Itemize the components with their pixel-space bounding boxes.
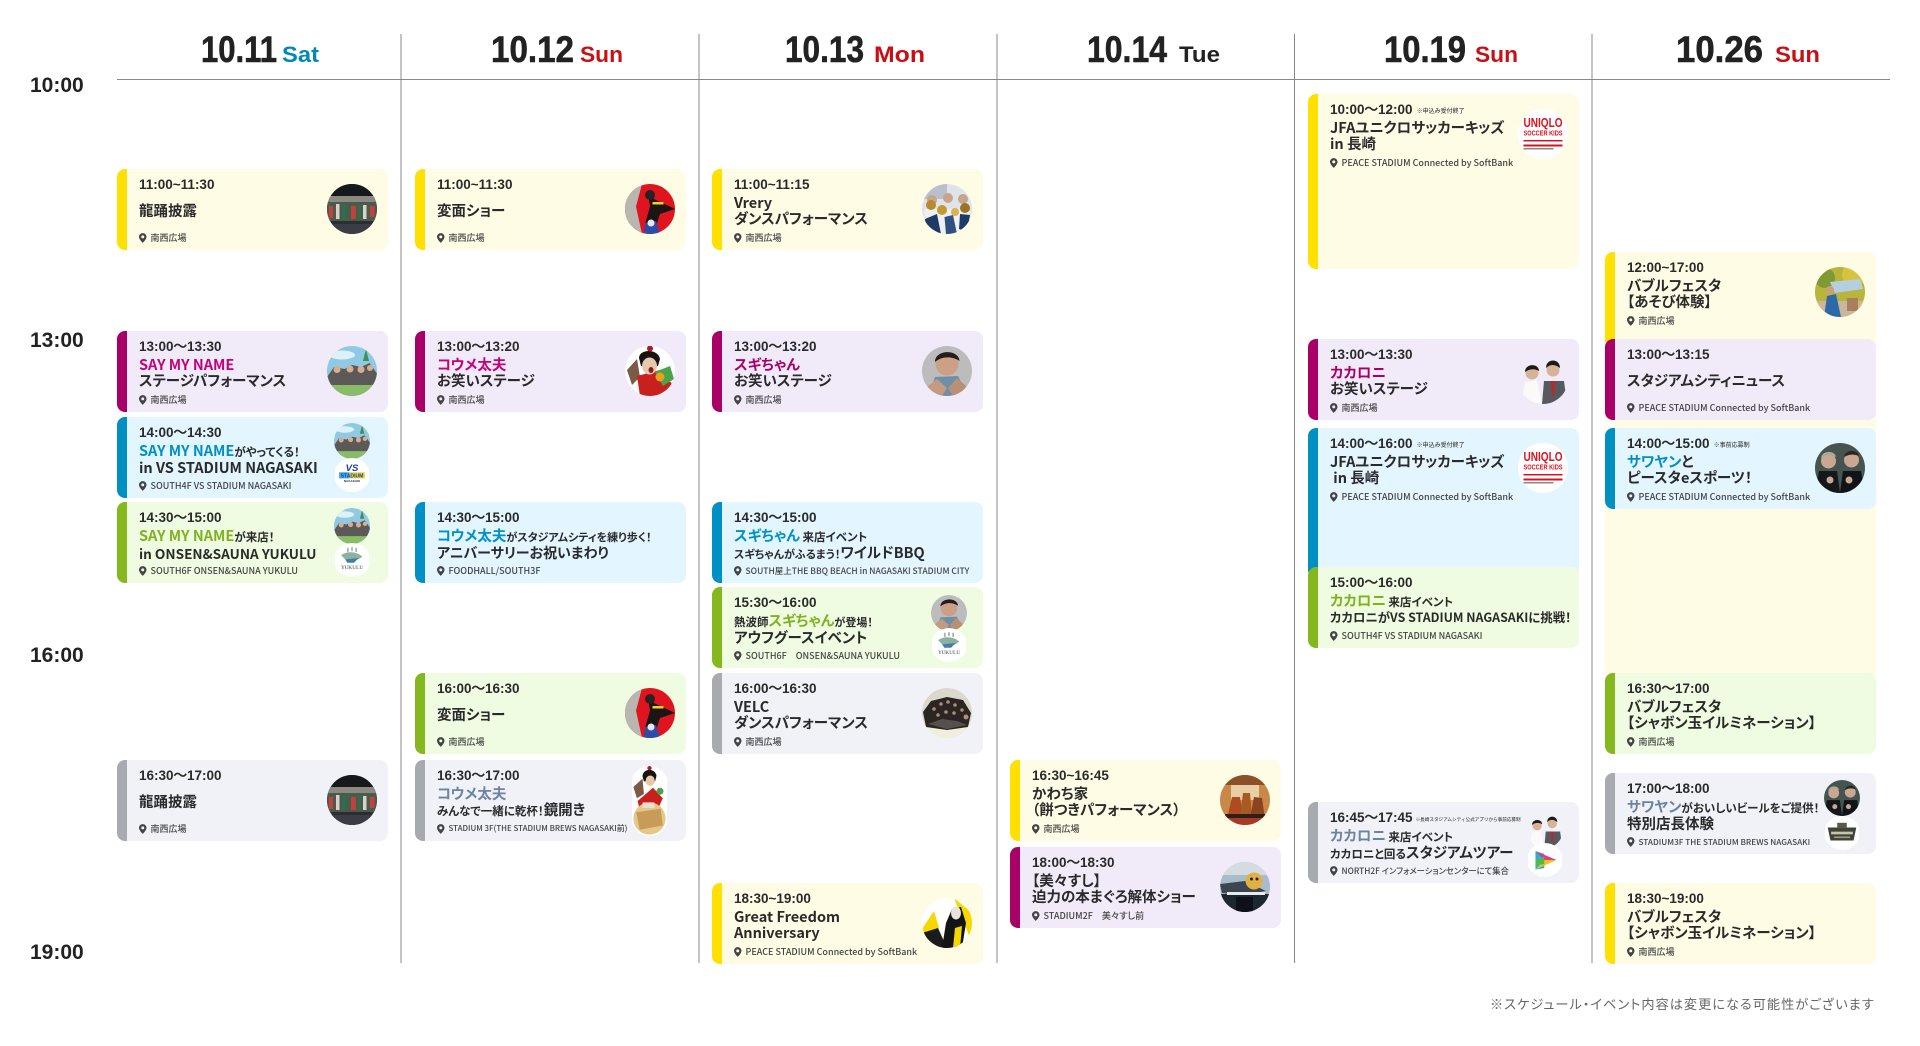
time: 18:30~19:00: [1627, 890, 1704, 906]
title: アニバーサリーお祝いまわり: [437, 543, 609, 563]
logo: [1518, 443, 1568, 493]
title: バブルフェスタ: [1627, 275, 1721, 296]
title: [1627, 278, 1721, 310]
title: バブルフェスタ: [1627, 696, 1721, 717]
title: [1330, 365, 1428, 397]
time: 14:30～15:00: [734, 510, 817, 524]
card: 10.19 16:45 スタジアムツアー: [1308, 802, 1579, 883]
location: SOUTH4F VS STADIUM NAGASAKI: [1342, 629, 1482, 642]
time axis label 10:00: 10:00: [30, 74, 84, 97]
title: [139, 354, 286, 391]
card: 10.26 18:30 シャボン玉: [1605, 883, 1876, 964]
time: 12:00~17:00: [1627, 260, 1704, 274]
title: in 長崎: [1333, 467, 1379, 488]
title: [139, 440, 318, 478]
title: [1032, 873, 1196, 905]
card: 10.26 17:00 特別店長体験: [1605, 773, 1876, 854]
title: SAY MY NAMEが来店！: [139, 525, 274, 546]
photo: [922, 346, 972, 396]
card: 10.14 18:00 美々すし: [1010, 847, 1281, 928]
location: [1627, 944, 1675, 960]
photo: [931, 595, 967, 630]
title: 龍踊披露: [139, 200, 197, 221]
photo: [922, 898, 972, 948]
title: [1032, 786, 1180, 818]
location: 南西広場: [150, 393, 187, 406]
time: 18:30~19:00: [734, 890, 811, 906]
time: 16:00～16:30: [437, 680, 520, 696]
location: [1627, 734, 1675, 750]
location: SOUTH6F ONSEN&SAUNA YUKULU: [150, 564, 298, 577]
time axis label 13:00: 13:00: [30, 329, 84, 352]
title: スギちゃんがふるまう！ワイルドBBQ: [734, 542, 925, 563]
card: 10.13 11:00 Vrery: [712, 169, 983, 250]
title: [1627, 699, 1816, 731]
time: 17:00～18:00: [1627, 780, 1710, 796]
title: お笑いステージ: [734, 370, 832, 391]
card: 10.26 14:00 サワヤン: [1605, 428, 1876, 509]
title: Anniversary: [734, 922, 820, 943]
location: PEACE STADIUM Connected by SoftBank: [1638, 401, 1810, 414]
title: [437, 354, 535, 391]
title: ステージパフォーマンス: [139, 370, 286, 391]
heading: 10.14 Tue: 10.14: [1087, 29, 1167, 70]
title: お笑いステージ: [437, 370, 535, 391]
photo: [334, 508, 370, 544]
title: コウメ太夫: [437, 354, 506, 375]
title: 【シャボン玉イルミネーション】: [1627, 712, 1816, 733]
card: 10.11 11:00 龍踊披露: [117, 169, 388, 250]
title: スギちゃん 来店イベント: [734, 525, 867, 546]
photo: [327, 346, 377, 396]
location: PEACE STADIUM Connected by SoftBank: [1638, 490, 1810, 503]
title: ピースタeスポーツ！: [1627, 467, 1752, 488]
card: 10.13 14:30 ワイルドBBQ: [712, 502, 983, 583]
time: 18:00～18:30: [1032, 854, 1115, 870]
time: 13:00～13:20: [734, 338, 817, 354]
logo: [335, 543, 369, 577]
photo: [327, 775, 377, 825]
location: 南西広場: [746, 393, 782, 406]
heading: 10.19 Sun: [1384, 29, 1518, 70]
location: 南西広場: [1342, 401, 1378, 414]
card: 10.26 16:30 シャボン玉: [1605, 673, 1876, 754]
title: 【美々すし】: [1032, 870, 1101, 891]
logo: [1527, 843, 1563, 877]
location: STADIUM 3F(THE STADIUM BREWS NAGASAKI前): [448, 823, 627, 834]
title: [1330, 120, 1504, 152]
card: 10.13 13:00 スギちゃん: [712, 331, 983, 412]
location: [1627, 313, 1675, 329]
heading: 10.14 Tue: [1087, 29, 1220, 70]
photo: [334, 423, 370, 458]
heading: 10.19 Sun: Sun: [1475, 42, 1518, 67]
title: [734, 909, 840, 941]
title: Vrery: [734, 192, 772, 213]
title: [437, 783, 585, 820]
time: 14:30～15:00: [139, 510, 222, 524]
title: スタジアムシティニュース: [1627, 370, 1785, 391]
title: サワヤンと: [1627, 451, 1693, 472]
title: 変面ショー: [437, 704, 505, 725]
title: [734, 610, 873, 648]
heading: 10.11 Sat: 10.11: [201, 29, 277, 70]
heading: 10.26 Sun: Sun: [1775, 42, 1820, 67]
photo: [625, 184, 675, 234]
time: 13:00～13:30: [1330, 346, 1413, 362]
location: SOUTH屋上THE BBQ BEACH in NAGASAKI STADIUM CITY: [746, 565, 969, 577]
photo: [1220, 862, 1270, 912]
photo: [1815, 267, 1865, 317]
logo: [1518, 109, 1568, 159]
time: 16:30~16:45: [1032, 768, 1109, 782]
card: 10.14 16:30 かわち家: [1010, 760, 1281, 841]
title: [1627, 799, 1819, 832]
title: カカロニ: [1330, 362, 1386, 383]
location: STADIUM2F 美々すし前: [1044, 909, 1144, 922]
location: 南西広場: [150, 822, 187, 835]
title: 変面ショー: [437, 200, 505, 221]
card: 10.19 14:00 JFA: [1308, 428, 1579, 578]
card: 10.26 13:00 ニュース: [1605, 339, 1876, 420]
location: 南西広場: [1044, 822, 1080, 835]
time: 11:00~11:30: [437, 176, 512, 192]
location: PEACE STADIUM Connected by SoftBank: [1342, 490, 1513, 503]
logo: [1824, 816, 1860, 850]
footnote: ※スケジュール・イベント内容は変更になる可能性がございます: [1490, 994, 1875, 1013]
photo: [625, 346, 675, 396]
time: 14:00～15:00 ※事前応募制: [1627, 436, 1750, 450]
title: SAY MY NAMEがやってくる！: [139, 440, 300, 461]
photo: [1824, 780, 1860, 816]
photo: [1220, 775, 1270, 825]
title: [1330, 593, 1571, 626]
card: 10.11 14:30 Yukulu: [117, 502, 388, 583]
logo: [932, 628, 966, 662]
card: 10.26 12:00 バブルフェスタ: [1605, 252, 1876, 682]
title: ダンスパフォーマンス: [734, 208, 868, 229]
title: Great Freedom: [734, 906, 840, 927]
photo: [1815, 443, 1865, 493]
title: サワヤンがおいしいビールをご提供！: [1627, 796, 1819, 817]
time: 13:00～13:20: [437, 338, 520, 354]
time: 16:00～16:30: [734, 680, 817, 696]
location: 南西広場: [746, 735, 782, 748]
title: SAY MY NAME: [139, 354, 234, 375]
location: 南西広場: [448, 735, 485, 748]
heading: 10.13 Mon: [785, 29, 925, 70]
location: SOUTH6F ONSEN&SAUNA YUKULU: [746, 649, 900, 662]
logo: [335, 458, 369, 492]
time: 11:00~11:30: [139, 176, 214, 192]
title: 特別店長体験: [1627, 813, 1714, 834]
location: 南西広場: [448, 231, 485, 244]
title: コウメ太夫がスタジアムシティを練り歩く！: [437, 525, 652, 546]
location: 南西広場: [1638, 735, 1675, 748]
title: [1330, 828, 1513, 862]
time: 14:30～15:00: [437, 510, 520, 524]
title: かわち家: [1032, 783, 1088, 804]
location: PEACE STADIUM Connected by SoftBank: [1342, 156, 1513, 169]
location: PEACE STADIUM Connected by SoftBank: [746, 945, 917, 958]
title: in VS STADIUM NAGASAKI: [139, 457, 318, 478]
location: 南西広場: [150, 231, 187, 244]
time: 15:30～16:00: [734, 594, 817, 610]
card: 10.13 18:30 Great Freedom: [712, 883, 983, 964]
title: コウメ太夫: [437, 783, 506, 804]
title: [1627, 454, 1752, 486]
location: [1032, 821, 1080, 837]
heading: 10.13 Mon: Mon: [874, 42, 925, 67]
time axis label 16:00: 16:00: [30, 644, 84, 667]
location: NORTH2F インフォメーションセンターにて集合: [1342, 865, 1509, 877]
title: [1627, 909, 1816, 941]
card: 10.19 13:00 カカロニ: [1308, 339, 1579, 420]
time: 14:00～16:00 ※申込み受付終了: [1330, 436, 1465, 450]
time axis label 19:00: 19:00: [30, 941, 84, 964]
title: [734, 192, 868, 229]
heading: 10.12 Sun: Sun: [580, 42, 623, 67]
location: [734, 734, 782, 750]
colour bar: [1605, 252, 1615, 342]
title: みんなで一緒に乾杯！鏡開き: [437, 799, 585, 820]
card: 10.13 15:30 アウフグース: [712, 587, 983, 668]
card: 10.12 13:00 コウメ太夫: [415, 331, 686, 412]
title: [139, 525, 316, 563]
time: 16:30～17:00: [139, 768, 222, 782]
title: in ONSEN&SAUNA YUKULU: [139, 543, 316, 563]
photo: [632, 766, 667, 836]
title: [734, 696, 868, 733]
location: 南西広場: [1638, 945, 1675, 958]
heading: 10.12 Sun: 10.12: [491, 29, 574, 70]
title: カカロニがVS STADIUM NAGASAKIに挑戦！: [1330, 608, 1571, 626]
title: 熱波師スギちゃんが登場！: [734, 610, 873, 631]
photo: [625, 688, 675, 738]
heading: 10.13 Mon: 10.13: [785, 29, 864, 70]
title: バブルフェスタ: [1627, 906, 1721, 927]
heading: 10.11 Sat: Sat: [282, 42, 320, 67]
title: [1330, 454, 1504, 486]
photo: [922, 688, 972, 738]
title: JFAユニクロサッカーキッズ: [1330, 117, 1504, 138]
card: 10.19 10:00 JFA: [1308, 94, 1579, 269]
heading: 10.19 Sun: 10.19: [1384, 29, 1466, 70]
title: [734, 354, 832, 391]
card: 10.13 16:00 VELC: [712, 673, 983, 754]
title: カカロニと回るスタジアムツアー: [1330, 842, 1513, 863]
time: 16:45～17:45 ※長崎スタジアムシティ公式アプリから事前応募制: [1330, 810, 1521, 824]
location: 南西広場: [746, 231, 782, 244]
title: 龍踊披露: [139, 791, 197, 812]
title: in 長崎: [1330, 133, 1376, 154]
time: 11:00~11:15: [734, 176, 809, 192]
title: カカロニ 来店イベント: [1330, 590, 1453, 611]
location: 南西広場: [1638, 314, 1675, 327]
card: 10.12 16:30 鏡開き: [415, 760, 686, 841]
time: 15:00～16:00: [1330, 574, 1413, 590]
card: 10.12 16:00 変面ショー: [415, 673, 686, 754]
photo: [327, 184, 377, 234]
card: 10.11 13:00 SAY MY NAME stage: [117, 331, 388, 412]
location: 南西広場: [448, 393, 485, 406]
card: 10.12 11:00 変面ショー: [415, 169, 686, 250]
title: JFAユニクロサッカーキッズ: [1330, 451, 1504, 472]
title: VELC: [734, 696, 769, 717]
photo: [922, 184, 972, 234]
photo: [1527, 812, 1563, 848]
time: 16:30～17:00: [437, 768, 520, 782]
title: 【あそび体験】: [1627, 291, 1712, 312]
card: 10.11 14:00 VS Stadium: [117, 417, 388, 498]
heading: 10.26 Sun: 10.26: [1676, 29, 1763, 70]
gap notch: [1605, 420, 1615, 428]
location: STADIUM3F THE STADIUM BREWS NAGASAKI: [1638, 836, 1810, 848]
location: FOODHALL/SOUTH3F: [448, 564, 540, 577]
title: スギちゃん: [734, 354, 800, 375]
title: 【シャボン玉イルミネーション】: [1627, 922, 1816, 943]
card: 10.12 14:30 アニバーサリーお祝いまわり: [415, 502, 686, 583]
title: 迫力の本まぐろ解体ショー: [1032, 886, 1196, 907]
title: お笑いステージ: [1330, 378, 1428, 399]
time: 13:00～13:30: [139, 338, 222, 354]
title: カカロニ 来店イベント: [1330, 825, 1453, 846]
title: [437, 525, 652, 563]
location: SOUTH4F VS STADIUM NAGASAKI: [150, 479, 291, 492]
time: 16:30～17:00: [1627, 680, 1710, 696]
time: 14:00～14:30: [139, 424, 222, 440]
time: 13:00～13:15: [1627, 346, 1710, 362]
title: （餅つきパフォーマンス）: [1032, 799, 1180, 820]
heading: 10.14 Tue: Tue: [1179, 42, 1220, 67]
photo: [1518, 354, 1568, 404]
card: 10.19 15:00 カカロニ来店: [1308, 567, 1579, 648]
location: [1330, 400, 1378, 416]
title: アウフグースイベント: [734, 627, 867, 648]
title: ダンスパフォーマンス: [734, 712, 868, 733]
heading: 10.26 Sun: [1676, 29, 1820, 70]
title: [734, 525, 925, 563]
time: 10:00～12:00 ※申込み受付終了: [1330, 102, 1465, 116]
card: 10.11 16:30 龍踊披露: [117, 760, 388, 841]
